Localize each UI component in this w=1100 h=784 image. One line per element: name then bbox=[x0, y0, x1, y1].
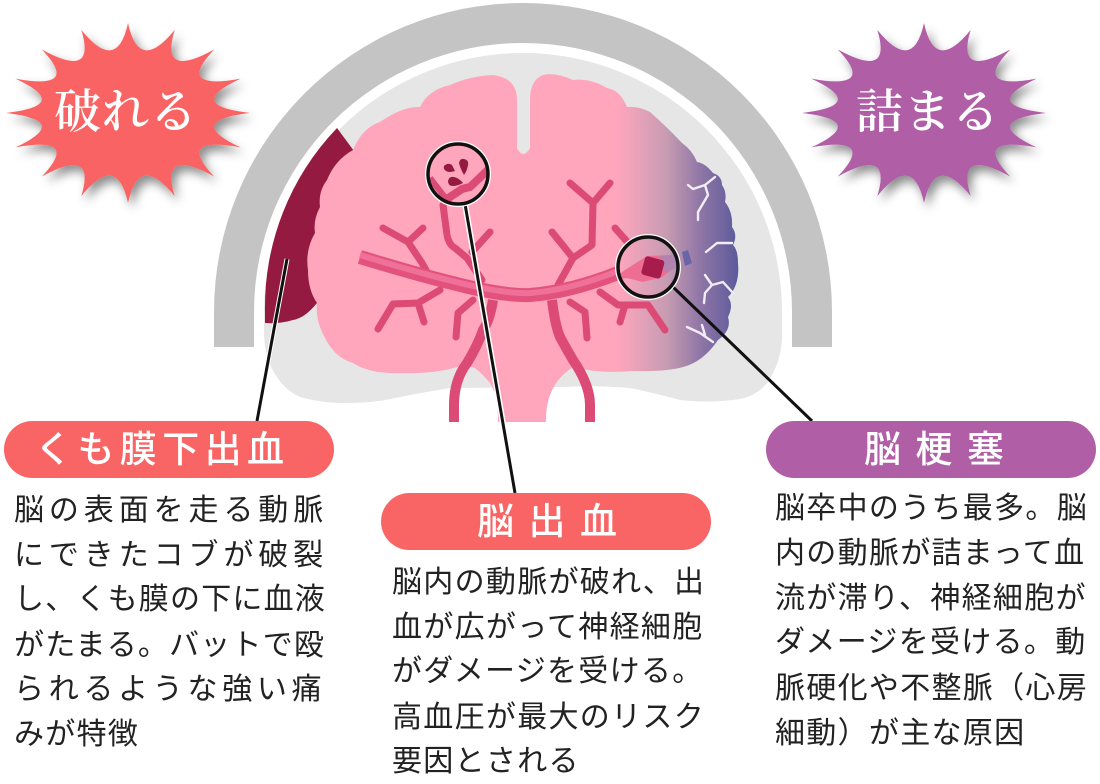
burst: 破れる: 破れる bbox=[54, 87, 198, 139]
text: くも膜下出血の説明: がたまる。バットで殴 bbox=[14, 629, 325, 662]
hemorrhage leader line bbox=[465, 204, 515, 493]
head cavity bbox=[264, 53, 782, 403]
burst: 破れる bbox=[6, 23, 250, 203]
text: くも膜下出血の説明 bbox=[14, 494, 328, 751]
text: くも膜下出血の説明: し、くも膜の下に血液 bbox=[14, 583, 326, 616]
burst: 詰まる bbox=[802, 23, 1046, 203]
text: 脳梗塞の説明: 脈硬化や不整脈（心房 bbox=[775, 672, 1088, 705]
brain illustration bbox=[6, 3, 1048, 493]
text: 脳梗塞の説明: 脳卒中のうち最多。脳 bbox=[775, 492, 1088, 525]
text: くも膜下出血の説明: られるような強い痛 bbox=[14, 673, 326, 706]
text: 脳梗塞の説明 bbox=[775, 492, 1088, 750]
text: 脳梗塞の説明: 流が滞り、神経細胞が bbox=[775, 582, 1087, 615]
magnifier: bleed bbox=[426, 142, 490, 206]
label: 脳梗塞 bbox=[766, 421, 1096, 478]
label: 脳出血 bbox=[381, 493, 711, 550]
magnifier: clot bbox=[612, 235, 680, 299]
cracks bbox=[687, 177, 733, 342]
occluded vessel stub bbox=[682, 250, 692, 266]
clot bbox=[641, 256, 665, 279]
text: くも膜下出血の説明: にできたコブが破裂 bbox=[14, 539, 328, 572]
text: 脳出血の説明: 要因とされる bbox=[392, 745, 580, 778]
text: 脳梗塞の説明: 細動）が主な原因 bbox=[775, 717, 1025, 750]
brain bbox=[307, 74, 738, 422]
text: 脳出血の説明 bbox=[392, 566, 705, 778]
arteries bbox=[360, 183, 665, 422]
label: 脳梗塞: 脳梗塞 bbox=[864, 429, 1018, 470]
burst: 詰まる: 詰まる bbox=[856, 87, 1000, 139]
text: 脳出血の説明: 脳内の動脈が破れ、出 bbox=[392, 566, 705, 599]
text: 脳出血の説明: 高血圧が最大のリスク bbox=[392, 701, 705, 734]
text: 脳梗塞の説明: 内の動脈が詰まって血 bbox=[775, 537, 1085, 570]
label: くも膜下出血: くも膜下出血 bbox=[35, 429, 289, 470]
label: くも膜下出血 bbox=[4, 421, 334, 478]
text: 脳梗塞の説明: ダメージを受ける。動 bbox=[775, 626, 1086, 659]
infarction leader line bbox=[673, 287, 812, 421]
text: くも膜下出血の説明: 脳の表面を走る動脈 bbox=[14, 494, 328, 527]
text: くも膜下出血の説明: みが特徴 bbox=[14, 718, 139, 751]
label: 脳出血: 脳出血 bbox=[477, 501, 632, 542]
subarachnoid hemorrhage bbox=[265, 128, 354, 323]
subarachnoid leader line bbox=[257, 259, 287, 421]
skull arc bbox=[214, 3, 832, 347]
text: 脳出血の説明: がダメージを受ける。 bbox=[392, 655, 704, 688]
text: 脳出血の説明: 血が広がって神経細胞 bbox=[392, 611, 704, 644]
